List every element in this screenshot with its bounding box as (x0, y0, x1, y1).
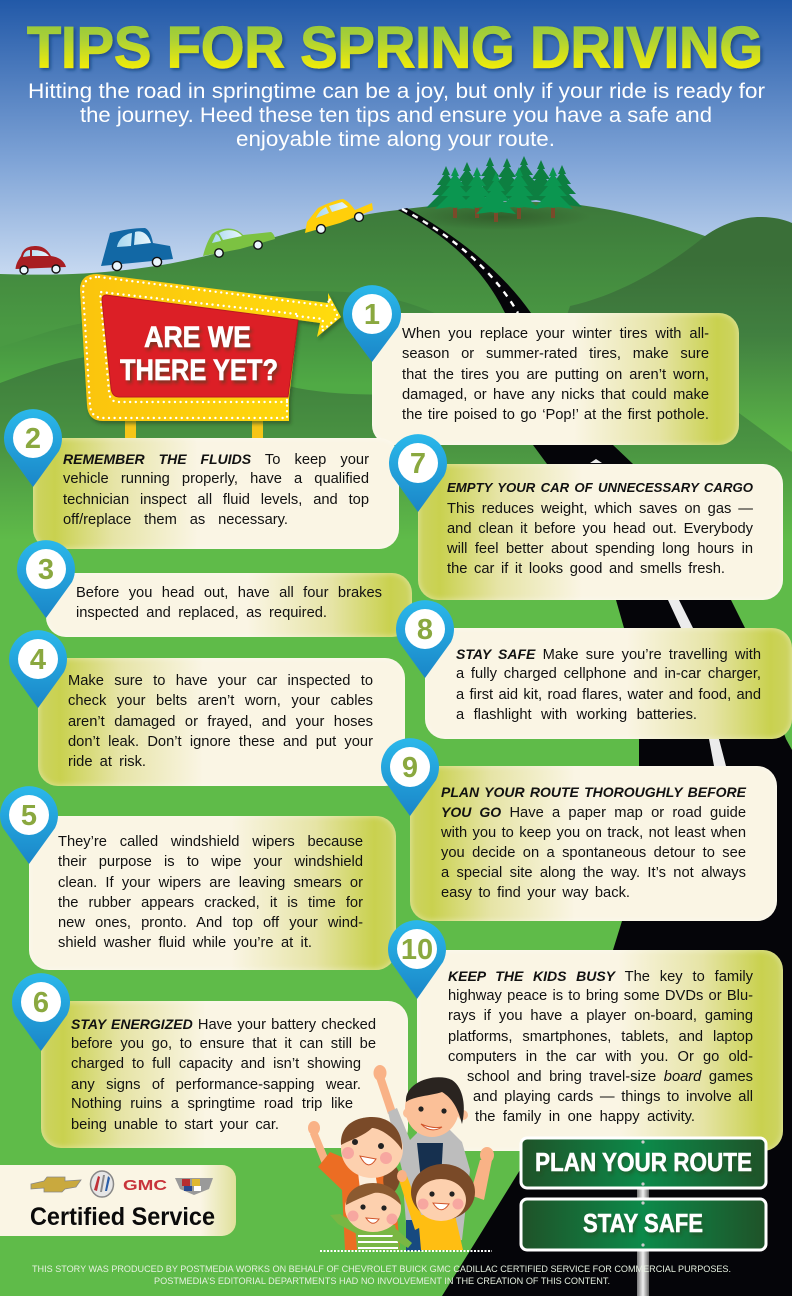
sign: are we there yet: THERE YET? (120, 354, 278, 387)
panel 1: tires: the tire poised to go ‘Pop!’ at the first pothole. (402, 406, 709, 422)
pin 8 (396, 600, 454, 678)
intro text: enjoyable time along your route. (236, 127, 555, 151)
sign: plan your route (521, 1138, 766, 1188)
pin 2: 2 (25, 423, 41, 455)
panel 6: stay energized: before you go, to ensure that it can still be (71, 1036, 376, 1052)
panel 1: tires: damaged, or have any nicks that could make (402, 386, 709, 402)
mother (308, 1117, 403, 1250)
panel 6: stay energized: charged to full capacity and isn’t showing (71, 1056, 361, 1072)
pin 7: 7 (410, 448, 426, 480)
panel 2: remember the fluids: vehicle running properly, have a qualified (63, 471, 369, 487)
logo panel: certified service (0, 1165, 236, 1236)
panel 4: belts, cables, hoses: ride at risk. (68, 754, 146, 770)
panel 5: windshield wipers: their purpose is to wipe your windshield (58, 854, 363, 870)
panel 3: brakes: inspected and replaced, as required. (76, 605, 327, 621)
pin 1: 1 (364, 299, 380, 331)
pine trees (416, 156, 582, 226)
panel 10: keep the kids busy: and playing cards — things to involve all (473, 1089, 753, 1105)
cars (16, 199, 373, 275)
panel 9: plan your route (410, 766, 777, 921)
blue car (101, 228, 173, 271)
pin 7 (389, 434, 447, 512)
sign: are we there yet (80, 274, 344, 438)
panel 8: stay safe (425, 628, 792, 739)
chevrolet logo (31, 1177, 81, 1192)
panel 5: windshield wipers: new ones, pronto. And top off your wind- (58, 915, 363, 931)
pin 5: 5 (21, 800, 37, 832)
panel 1: tires: season or summer-rated tires, make sure (402, 346, 709, 362)
pin 5 (0, 786, 58, 864)
panel 4: belts, cables, hoses: check your belts aren’t worn, your cables (68, 693, 373, 709)
panel 1: tires: that the tires you are putting on aren’t worn, (402, 366, 709, 382)
sign: plan your route: PLAN YOUR ROUTE (535, 1147, 752, 1177)
panel 6: stay energized: being unable to start your car. (71, 1116, 279, 1132)
panel 10: keep the kids busy (417, 950, 783, 1151)
panel 8: stay safe: STAY SAFE Make sure you’re travelling with (456, 646, 761, 663)
intro text: Hitting the road in springtime can be a joy, but only if your ride is ready for (28, 79, 765, 103)
pin 8: 8 (417, 614, 433, 646)
pin 2 (4, 409, 62, 487)
panel 1: tires (372, 313, 739, 445)
gmc logo: GMC (123, 1177, 167, 1194)
panel 5: windshield wipers: They’re called windshield wipers because (58, 834, 363, 850)
footer disclaimer: POSTMEDIA’S EDITORIAL DEPARTMENTS HAD NO INVOLVEMENT IN THE CREATION OF THIS CONTENT. (154, 1276, 610, 1287)
panel 7: empty your car: EMPTY YOUR CAR OF UNNECESSARY CARGO (447, 480, 753, 495)
panel 5: windshield wipers: clean. If your wipers are leaving smears or (58, 874, 363, 890)
pin 4: 4 (30, 644, 46, 676)
panel 5: windshield wipers: the rubber appears cracked, it is time for (58, 894, 363, 910)
yellow car (305, 199, 373, 233)
panel 9: plan your route: you decide on a spontaneous detour to see (441, 845, 746, 861)
panel 5: windshield wipers (29, 816, 396, 970)
panel 2: remember the fluids (33, 438, 399, 549)
panel 7: empty your car (418, 464, 783, 600)
panel 5: windshield wipers: shield washer fluid while you’re at it. (58, 935, 312, 951)
panel 9: plan your route: PLAN YOUR ROUTE THOROUGHLY BEFORE (441, 784, 746, 800)
panel 10: keep the kids busy: rays if you have a player on-board, gaming (448, 1008, 753, 1024)
pin 6: 6 (33, 987, 49, 1019)
sign: stay safe: STAY SAFE (583, 1208, 703, 1238)
intro text (28, 79, 765, 151)
panel 6: stay energized (41, 1001, 408, 1148)
certified service text: Certified Service (30, 1203, 215, 1231)
panel 4: belts, cables, hoses: aren’t damaged or frayed, and your hoses (68, 714, 373, 730)
pin 3 (17, 540, 75, 618)
panel 9: plan your route: easy to find your way back. (441, 885, 630, 901)
panel 3: brakes: Before you head out, have all four brakes (76, 585, 382, 601)
panel 1: tires: When you replace your winter tires with all- (402, 326, 709, 342)
panel 8: stay safe: a flashlight with working batteries. (456, 706, 697, 722)
pin 9: 9 (402, 752, 418, 784)
footer disclaimer (32, 1264, 731, 1287)
panel 8: stay safe: a first aid kit, road flares, water and food, and (456, 686, 761, 702)
panel 10: keep the kids busy: school and bring travel-size board games (467, 1068, 753, 1084)
panel 7: empty your car: and clean it before you head out. Everybody (447, 521, 753, 537)
pin 4 (9, 630, 67, 708)
pin 6 (12, 973, 70, 1051)
panel 6: stay energized: any signs of performance-sapping wear. (71, 1076, 361, 1092)
pin 1 (343, 285, 401, 362)
panel 10: keep the kids busy: computers in the car with you. Or go old- (448, 1048, 753, 1064)
sign: are we there yet: ARE WE (144, 321, 251, 354)
title: TIPS FOR SPRING DRIVING (27, 16, 763, 80)
panel 10: keep the kids busy: highway peace is to bring some DVDs or Blu- (448, 988, 753, 1004)
intro text: the journey. Heed these ten tips and ensure you have a safe and (80, 103, 712, 127)
panel 7: empty your car: will feel better about spending long hours in (447, 541, 753, 557)
father (374, 1065, 494, 1251)
panel 10: keep the kids busy: KEEP THE KIDS BUSY The key to family (448, 968, 753, 985)
panel 4: belts, cables, hoses (38, 658, 405, 786)
panel 8: stay safe: a fully charged cellphone and in-car charger, (456, 666, 761, 682)
panel 6: stay energized: STAY ENERGIZED Have your battery checked (71, 1016, 376, 1033)
panel 10: keep the kids busy: platforms, smartphones, tablets, and laptop (448, 1028, 753, 1044)
panel 2: remember the fluids: off/replace them as necessary. (63, 512, 288, 528)
panel 2: remember the fluids: REMEMBER THE FLUIDS To keep your (63, 451, 369, 468)
pin 9 (381, 738, 439, 816)
panel 7: empty your car: This reduces weight, which saves on gas — (447, 500, 753, 516)
pin 10: 10 (401, 934, 433, 966)
panel 10: keep the kids busy: the family in one happy activity. (475, 1109, 695, 1125)
panel 9: plan your route: with you to keep you on track, not least when (441, 825, 746, 841)
signpost (637, 1185, 649, 1296)
buick logo (90, 1171, 114, 1197)
sign: stay safe (521, 1199, 766, 1250)
panel 9: plan your route: YOU GO Have a paper map or road guide (441, 804, 746, 821)
panel 9: plan your route: a special site along the way. It’s not always (441, 865, 746, 881)
red car (16, 246, 66, 274)
footer disclaimer: THIS STORY WAS PRODUCED BY POSTMEDIA WORKS ON BEHALF OF CHEVROLET BUICK GMC CADILLAC CERTIFIED SERVICE FOR COMMERCIAL PURPOSES. (32, 1264, 731, 1275)
panel 2: remember the fluids: technician inspect all fluid levels, and top (63, 492, 369, 508)
panel 4: belts, cables, hoses: Make sure to have your car inspected to (68, 673, 373, 689)
cadillac logo (175, 1178, 213, 1195)
pin 10 (388, 920, 446, 999)
panel 3: brakes (46, 573, 412, 637)
panel 7: empty your car: the car if it looks good and smells fresh. (447, 561, 725, 577)
green car (203, 228, 275, 257)
pin 3: 3 (38, 554, 54, 586)
panel 4: belts, cables, hoses: don’t leak. Don’t ignore these and put your (68, 734, 373, 750)
girl (397, 1164, 475, 1250)
panel 6: stay energized: Nothing ruins a springtime road trip like (71, 1096, 353, 1112)
boy (330, 1183, 412, 1250)
